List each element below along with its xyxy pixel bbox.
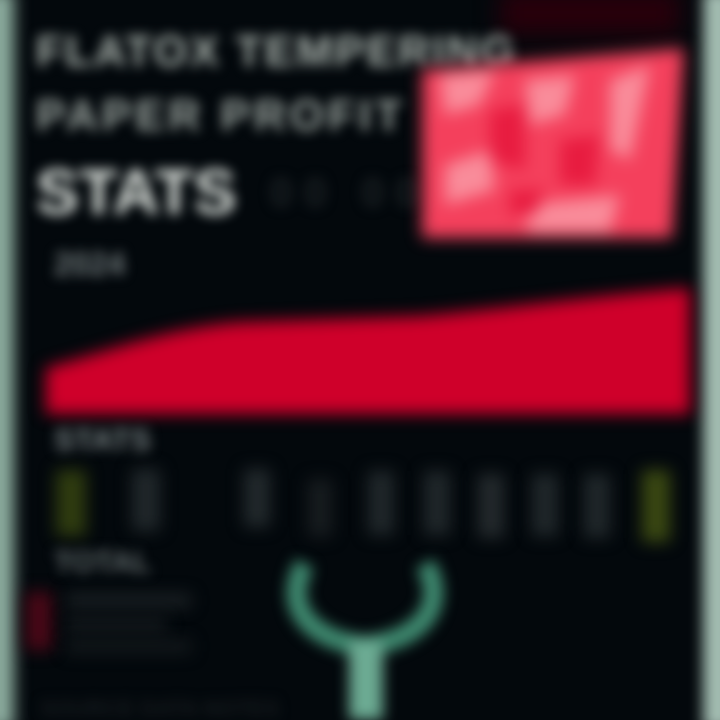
lower text block [68, 591, 190, 651]
left edge strip [0, 0, 14, 720]
title line 1: FLATOX TEMPERING [36, 27, 517, 76]
title line 2: PAPER PROFIT [36, 91, 406, 140]
red graphic block [408, 36, 696, 252]
title heading [30, 27, 520, 228]
section heading: lower: TOTAL [54, 546, 151, 579]
red marker [26, 592, 52, 650]
right edge strip [703, 0, 720, 720]
dark red top glow [500, 0, 680, 35]
title small figures: 00 00 [270, 171, 430, 215]
icon: green wrench [277, 553, 453, 720]
chart label: 2024 [54, 246, 125, 282]
green bar right [642, 470, 670, 542]
green bar left [56, 470, 86, 536]
gray bar group [128, 465, 614, 542]
red block highlights [440, 65, 650, 232]
title line 3: STATS [36, 156, 236, 228]
red block deep accents [490, 105, 600, 215]
section heading: stats row: STATS [54, 422, 151, 457]
